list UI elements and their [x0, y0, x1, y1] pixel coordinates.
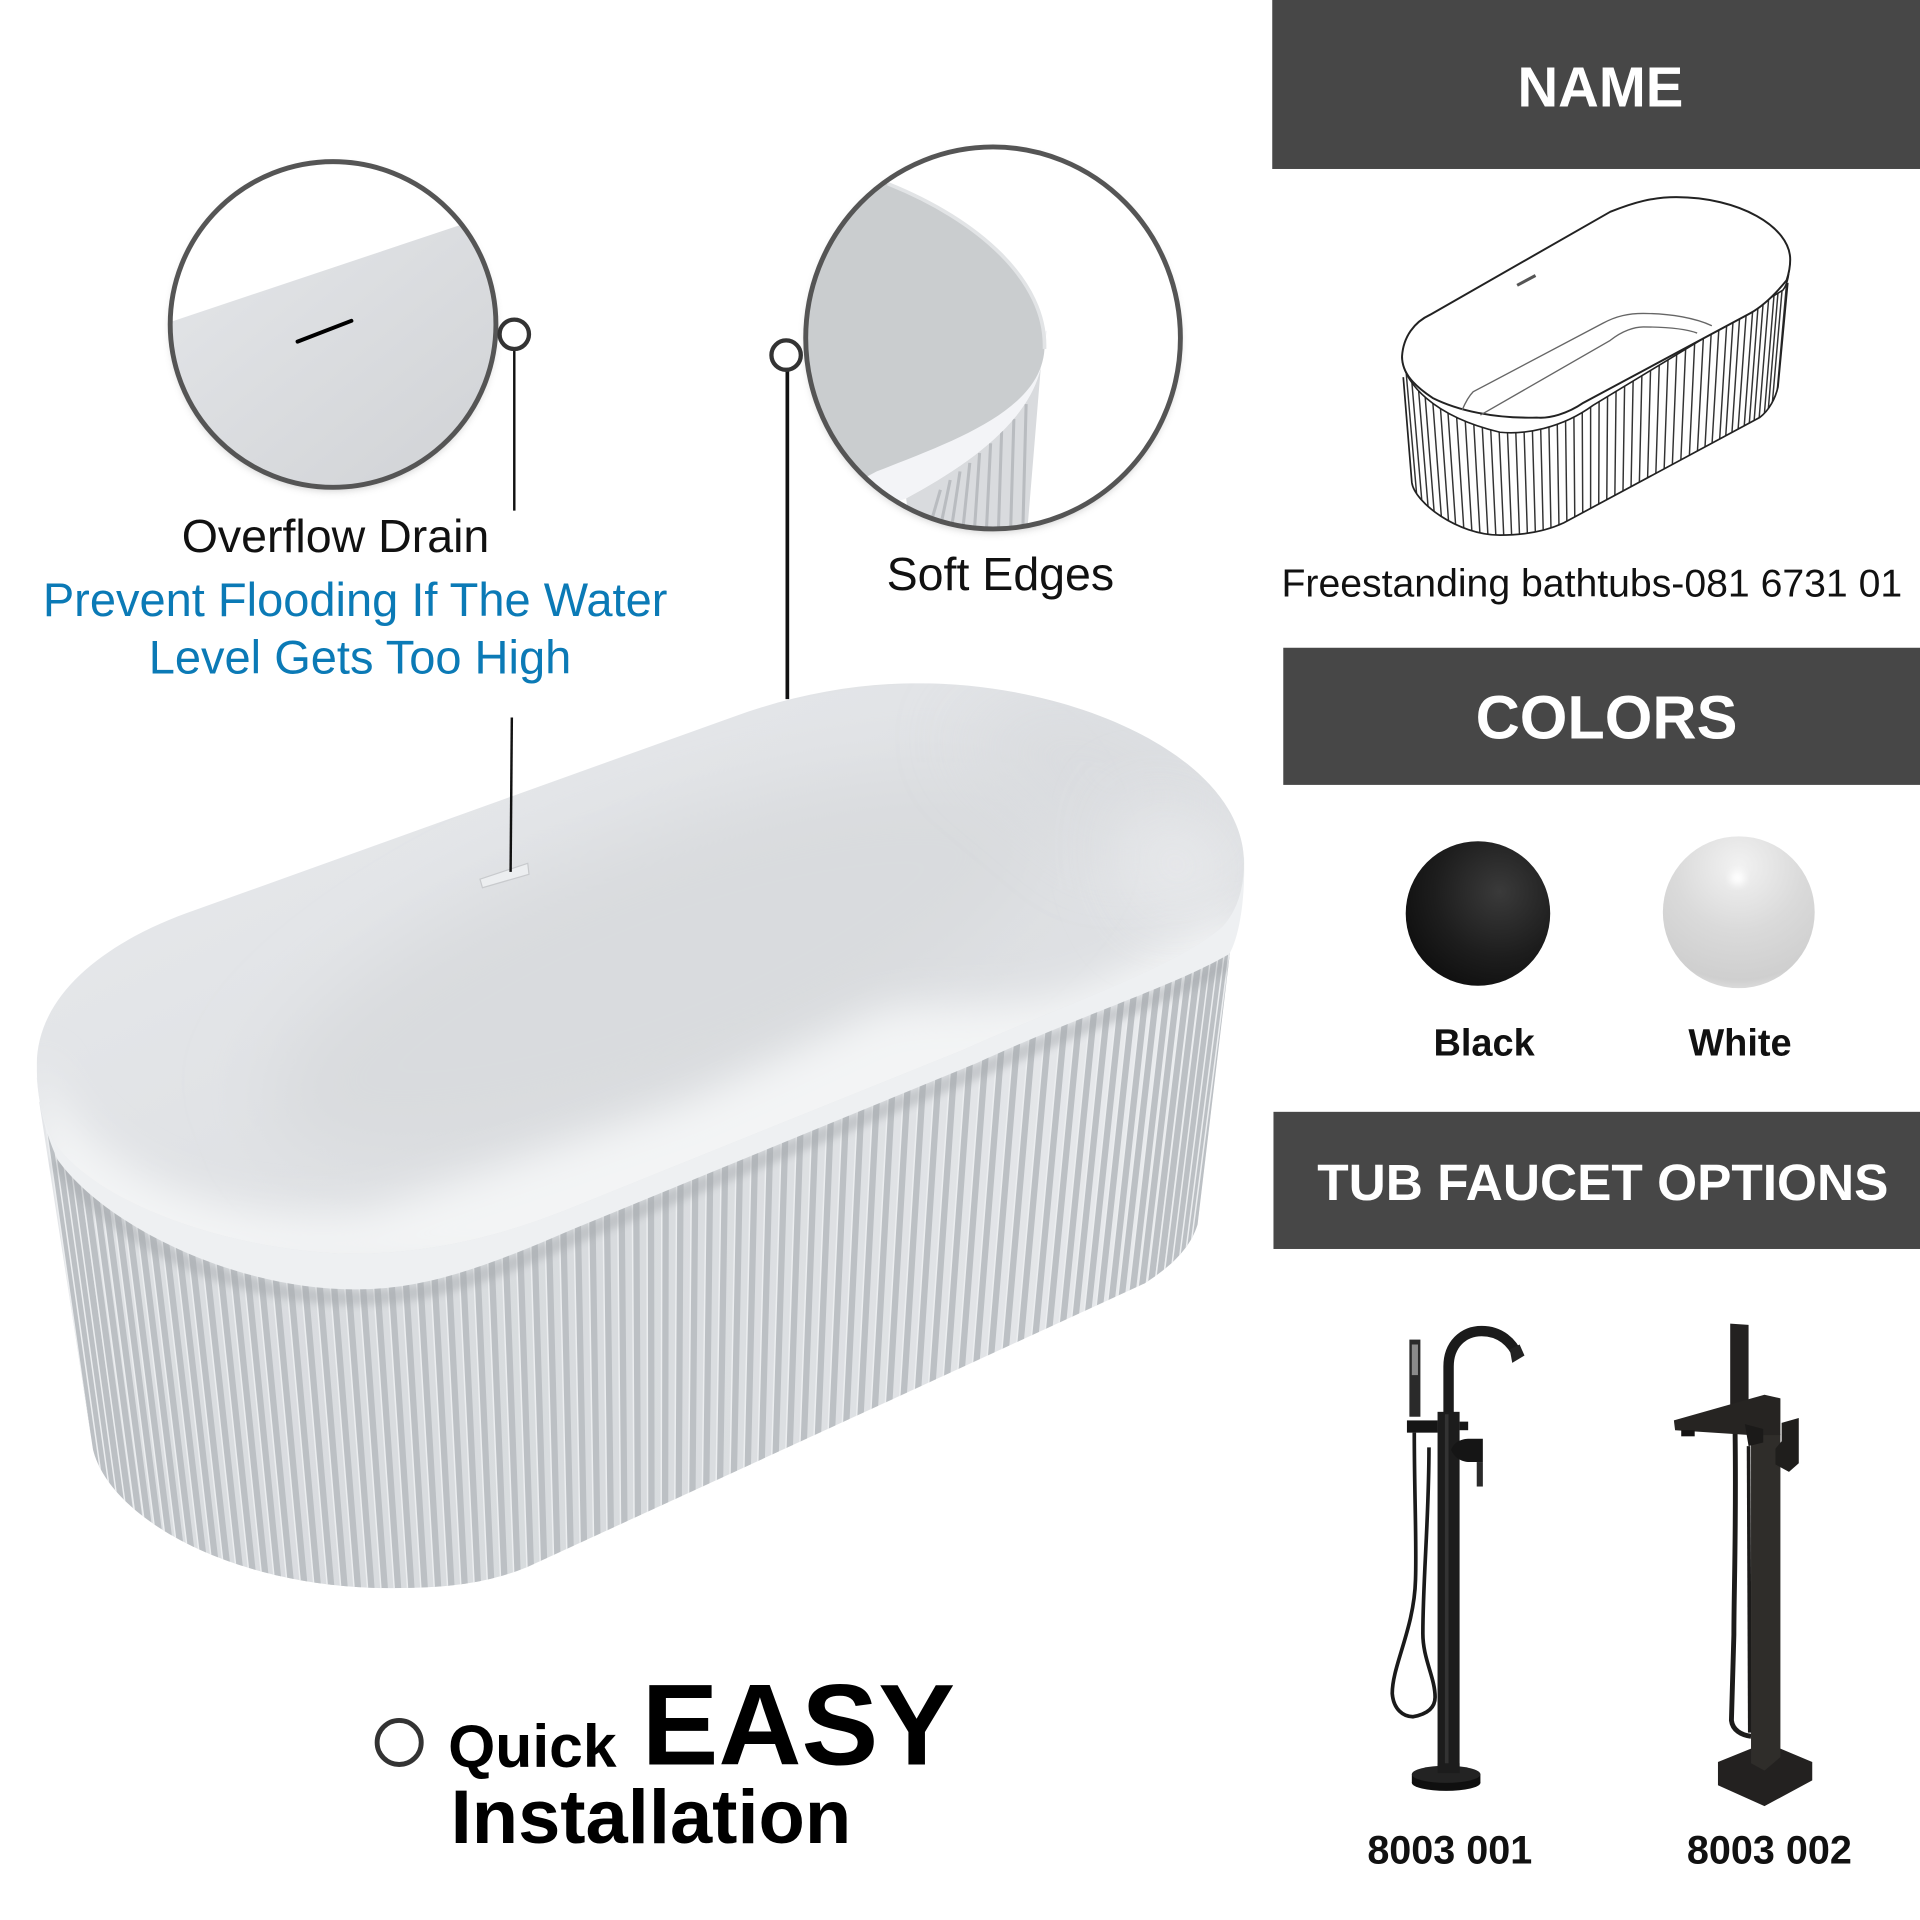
description: overflow drain	[43, 573, 667, 683]
heading: name: NAME	[1518, 56, 1683, 119]
label: overflow drain: Overflow Drain	[182, 510, 489, 562]
line drawing of bathtub	[1386, 197, 1795, 551]
heading: name	[1272, 0, 1920, 169]
callout: quick easy installation	[377, 1661, 955, 1860]
description: overflow drain: Prevent Flooding If The Water	[43, 573, 667, 626]
faucet option: 8003 001: 8003 001	[1367, 1829, 1532, 1873]
heading: tub faucet options: TUB FAUCET OPTIONS	[1317, 1153, 1888, 1211]
color swatch: black	[1406, 841, 1550, 1065]
detail circle: overflow drain	[166, 159, 500, 494]
marker ring: overflow drain	[500, 320, 529, 349]
icon: marker ring	[377, 1720, 421, 1764]
tub rim band	[37, 857, 1244, 1289]
tub inner bowl	[37, 684, 1244, 1224]
caption: product name: Freestanding bathtubs-081 6731 01	[1281, 562, 1902, 605]
heading: tub faucet options	[1273, 1112, 1920, 1249]
color swatch: white	[1663, 836, 1815, 1065]
heading: colors	[1283, 648, 1920, 785]
connector line: overflow drain	[511, 349, 514, 872]
panel: main bathtub illustration	[37, 684, 1244, 1588]
connector line: soft edges	[786, 370, 789, 699]
faucet option: 8003 002	[1674, 1324, 1852, 1873]
callout: quick easy installation: EASY	[642, 1661, 955, 1789]
faucet option: 8003 001	[1367, 1331, 1532, 1873]
color swatch: black: Black	[1433, 1023, 1536, 1065]
heading: colors: COLORS	[1476, 683, 1737, 751]
marker ring: soft edges	[771, 340, 801, 370]
tub fluted body	[39, 953, 1230, 1588]
callout: quick easy installation: Installation	[451, 1775, 851, 1860]
detail circle: soft edges	[784, 147, 1180, 545]
description: overflow drain: Level Gets Too High	[149, 630, 571, 683]
color swatch: white: White	[1688, 1023, 1792, 1065]
faucet option: 8003 002: 8003 002	[1687, 1829, 1852, 1873]
callout: quick easy installation: Quick	[448, 1712, 617, 1780]
label: soft edges: Soft Edges	[887, 548, 1114, 600]
overflow drain on tub	[480, 863, 529, 888]
